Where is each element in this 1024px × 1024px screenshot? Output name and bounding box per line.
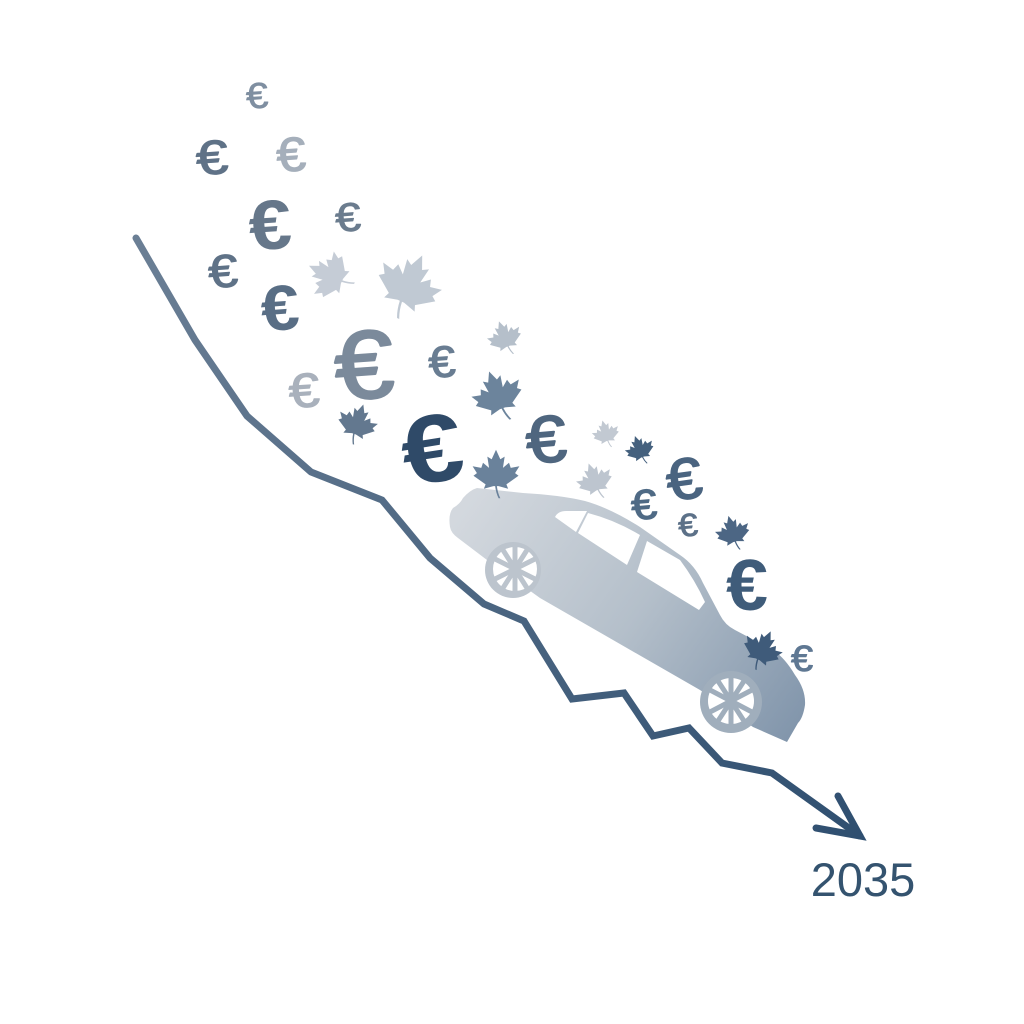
euro symbols: €	[677, 508, 700, 544]
euro symbols: €	[287, 362, 321, 418]
front wheel	[700, 671, 762, 733]
euro symbols: €	[334, 195, 362, 241]
euro symbols: €	[393, 391, 471, 507]
falling price line with arrow	[136, 238, 860, 836]
maple leaves	[299, 242, 789, 677]
euro symbols: €	[427, 336, 457, 387]
euro symbols: €	[629, 481, 659, 530]
rear wheel	[485, 542, 541, 598]
euro symbols: €	[726, 545, 768, 626]
euro symbols: €	[245, 76, 269, 117]
euro symbols: €	[331, 310, 397, 421]
euro symbols	[194, 76, 813, 680]
euro symbols: €	[791, 640, 813, 680]
euro symbols: €	[274, 126, 307, 182]
car silhouette	[449, 488, 805, 742]
euro symbols: €	[258, 272, 302, 346]
euro symbols: €	[662, 445, 706, 514]
euro symbols: €	[206, 244, 239, 298]
euro symbols: €	[246, 184, 294, 266]
euro symbols: €	[523, 400, 569, 478]
euro symbols: €	[194, 130, 230, 186]
year label: 2035	[811, 853, 915, 906]
